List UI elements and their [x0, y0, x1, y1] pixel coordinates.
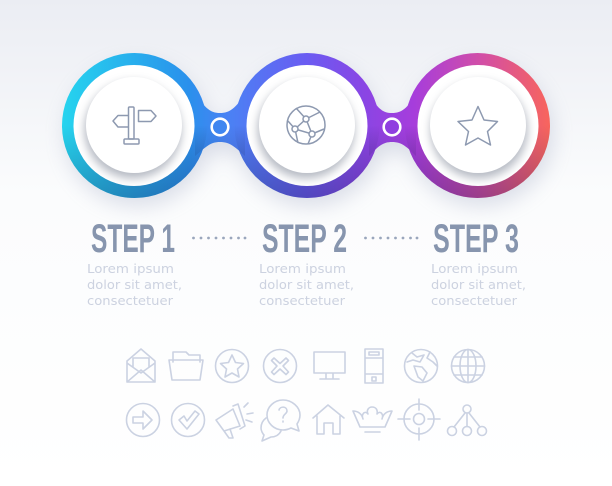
icon: folder: [169, 352, 203, 380]
text block: step 1: consectetuer: [87, 293, 174, 308]
icon: network globe: [287, 106, 325, 144]
step 2 disc: [246, 65, 368, 186]
icon: megaphone: [216, 403, 253, 438]
text block: step 1: dolor sit amet,: [87, 277, 182, 292]
icon: crown: [353, 407, 392, 432]
icon: phone: [365, 349, 383, 383]
text block: step 2: [259, 261, 354, 308]
text block: step 3: dolor sit amet,: [431, 277, 526, 292]
text block: step 3: consectetuer: [431, 293, 518, 308]
dotted connector 1: [192, 237, 246, 239]
heading: step 2: STEP 2: [262, 217, 347, 261]
icon: cross circle: [264, 350, 296, 382]
icon: globe: [452, 350, 484, 382]
text block: step 3: [431, 261, 526, 308]
icon: star circle: [216, 350, 248, 382]
heading: step 1: STEP 1: [91, 217, 175, 261]
icon: arrow circle: [126, 404, 160, 436]
icon: earth: [404, 350, 438, 382]
step 3 disc: [418, 65, 538, 186]
text block: step 2: dolor sit amet,: [259, 277, 354, 292]
text block: step 2: Lorem ipsum: [259, 261, 346, 276]
dotted connector 2: [364, 237, 418, 239]
icon set: [126, 349, 486, 441]
step 1 disc: [74, 65, 194, 186]
text block: step 2: consectetuer: [259, 293, 346, 308]
three-step connected ring chain: [62, 53, 553, 207]
connector node 2: [384, 119, 400, 135]
text block: step 1: [87, 261, 182, 308]
icon: check circle: [172, 404, 204, 436]
icon: star: [458, 106, 498, 145]
icon: house: [313, 405, 344, 434]
icon: speech bubbles: [261, 400, 300, 441]
text block: step 1: Lorem ipsum: [87, 261, 174, 276]
heading: step 3: STEP 3: [433, 217, 519, 261]
icon: network tree: [448, 405, 486, 436]
connector node 1: [212, 119, 228, 135]
icon: signpost: [113, 107, 156, 144]
icon: open envelope: [127, 349, 155, 382]
icon: monitor: [314, 352, 345, 379]
icon: target: [398, 399, 440, 440]
text block: step 3: Lorem ipsum: [431, 261, 518, 276]
